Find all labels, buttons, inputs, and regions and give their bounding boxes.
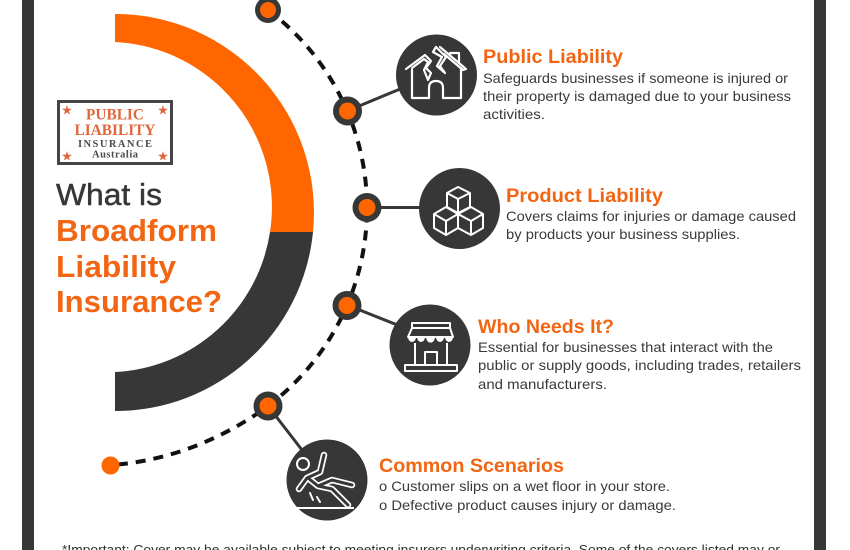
top end node [255,0,281,23]
text block: who needs it: and manufacturers. [478,376,607,392]
right border bar [814,0,826,550]
text block: product liability [506,186,796,242]
icon: boxes [419,168,500,249]
semicircle graphic [115,14,314,411]
node: public liability [333,96,362,126]
text block: common scenarios: o Defective product causes injury or damage. [379,497,676,513]
logo: ★ [157,148,169,164]
node: product liability [352,193,382,222]
title: Insurance? [56,285,222,319]
dashed timeline arc [110,10,367,465]
icon: person slipping [286,440,368,520]
logo: Australia [92,150,139,160]
connector: public liability [347,87,405,111]
logo [58,102,172,164]
text block: product liability: Covers claims for injuries or damage caused [506,208,796,224]
logo: PUBLIC [86,106,144,124]
node: common scenarios [254,392,282,420]
title: Liability [56,250,176,284]
text block: common scenarios: Common Scenarios [379,456,564,477]
text block: product liability: by products your business supplies. [506,226,740,242]
text block: who needs it: Essential for businesses that interact with the [478,339,773,355]
text block: public liability: activities. [483,106,545,122]
text block: common scenarios [379,456,676,513]
text block: public liability: Safeguards businesses if someone is injured or [483,70,788,86]
connector: product liability [367,206,425,209]
title: Broadform [56,214,217,248]
title [56,178,222,319]
text block: who needs it [478,317,801,392]
icon: storefront [390,304,470,386]
connector: who needs it [347,305,400,326]
node: who needs it [332,291,362,320]
text block: product liability: Product Liability [506,186,663,207]
logo: ★ [61,102,73,118]
left border bar [22,0,34,550]
icon: damaged house [396,34,477,116]
text block: common scenarios: o Customer slips on a wet floor in your store. [379,478,670,494]
text block: public liability: their property is damaged due to your business [483,88,791,104]
text block: who needs it: Who Needs It? [478,317,614,338]
text block: public liability [483,47,791,122]
logo: INSURANCE [78,139,152,150]
end dot [102,456,120,474]
text block: who needs it: public or supply goods, including trades, retailers [478,357,801,373]
title: What is [56,178,162,212]
logo: ★ [61,148,73,164]
text block: public liability: Public Liability [483,47,623,68]
logo: LIABILITY [74,122,156,139]
logo: ★ [157,102,169,118]
connector: common scenarios [268,406,302,450]
